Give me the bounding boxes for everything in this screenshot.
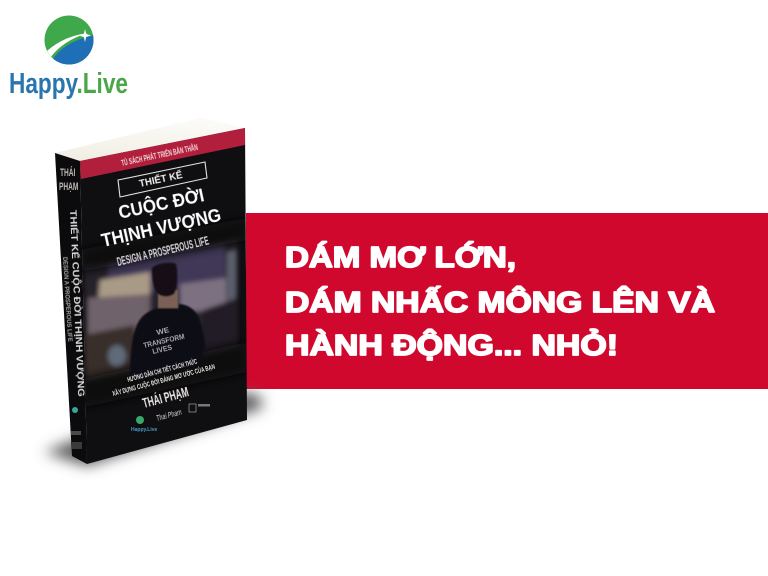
banner headline: HÀNH ĐỘNG... NHỎ! bbox=[285, 328, 618, 362]
red banner bbox=[246, 213, 768, 389]
book front cover bbox=[80, 128, 247, 464]
publisher logos: Happy.Live bbox=[131, 427, 158, 433]
book spine: THÁI bbox=[60, 166, 75, 178]
publisher logos bbox=[131, 404, 210, 433]
title: THIẾT KẾ: THIẾT KẾ bbox=[138, 168, 184, 190]
band label: TỦ SÁCH PHÁT TRIỂN BẢN THÂN bbox=[121, 143, 199, 168]
banner headline: DÁM NHẤC MÔNG LÊN VÀ bbox=[285, 285, 715, 319]
cover tagline: HƯỚNG DẪN CHI TIẾT CÁCH THỨC bbox=[126, 356, 198, 384]
cover tagline: XÂY DỰNG CUỘC ĐỜI ĐÁNG MƠ ƯỚC CỦA BẠN bbox=[111, 362, 216, 398]
photo top fade bbox=[80, 218, 247, 272]
book spine bbox=[55, 153, 87, 464]
banner headline: DÁM MƠ LỚN, bbox=[285, 240, 516, 274]
red top band bbox=[80, 128, 245, 179]
banner headline bbox=[285, 240, 715, 362]
book shadow bbox=[44, 392, 262, 466]
presenter figure bbox=[130, 263, 205, 380]
cover tagline bbox=[111, 356, 216, 398]
book spine: PHẠM bbox=[59, 180, 78, 192]
shirt slogan: WE bbox=[155, 325, 170, 337]
title: THỊNH VƯỢNG: THỊNH VƯỢNG bbox=[100, 205, 223, 251]
book top edge bbox=[55, 118, 245, 161]
shirt slogan bbox=[142, 325, 185, 356]
photo base bbox=[83, 240, 240, 334]
title box bbox=[118, 162, 207, 197]
shirt slogan: TRANSFORM bbox=[142, 332, 185, 350]
author name: THÁI PHẠM bbox=[141, 383, 190, 411]
shirt slogan: LIVES bbox=[151, 343, 173, 356]
logo wordmark: Happy.Live bbox=[9, 68, 128, 100]
book spine: THIẾT KẾ CUỘC ĐỜI THỊNH VƯỢNG bbox=[68, 210, 87, 397]
photo bottom fade bbox=[80, 342, 247, 408]
book bbox=[55, 118, 247, 464]
publisher logos: Thai Pham bbox=[155, 407, 183, 423]
book spine: DESIGN A PROSPEROUS LIFE bbox=[61, 257, 73, 343]
subtitle: DESIGN A PROSPEROUS LIFE bbox=[115, 234, 210, 269]
icon: globe with swoosh bbox=[44, 15, 94, 66]
title: CUỘC ĐỜI: CUỘC ĐỜI bbox=[116, 184, 206, 223]
logo: Happy.Live bbox=[9, 15, 128, 100]
cover photo bbox=[80, 218, 247, 408]
